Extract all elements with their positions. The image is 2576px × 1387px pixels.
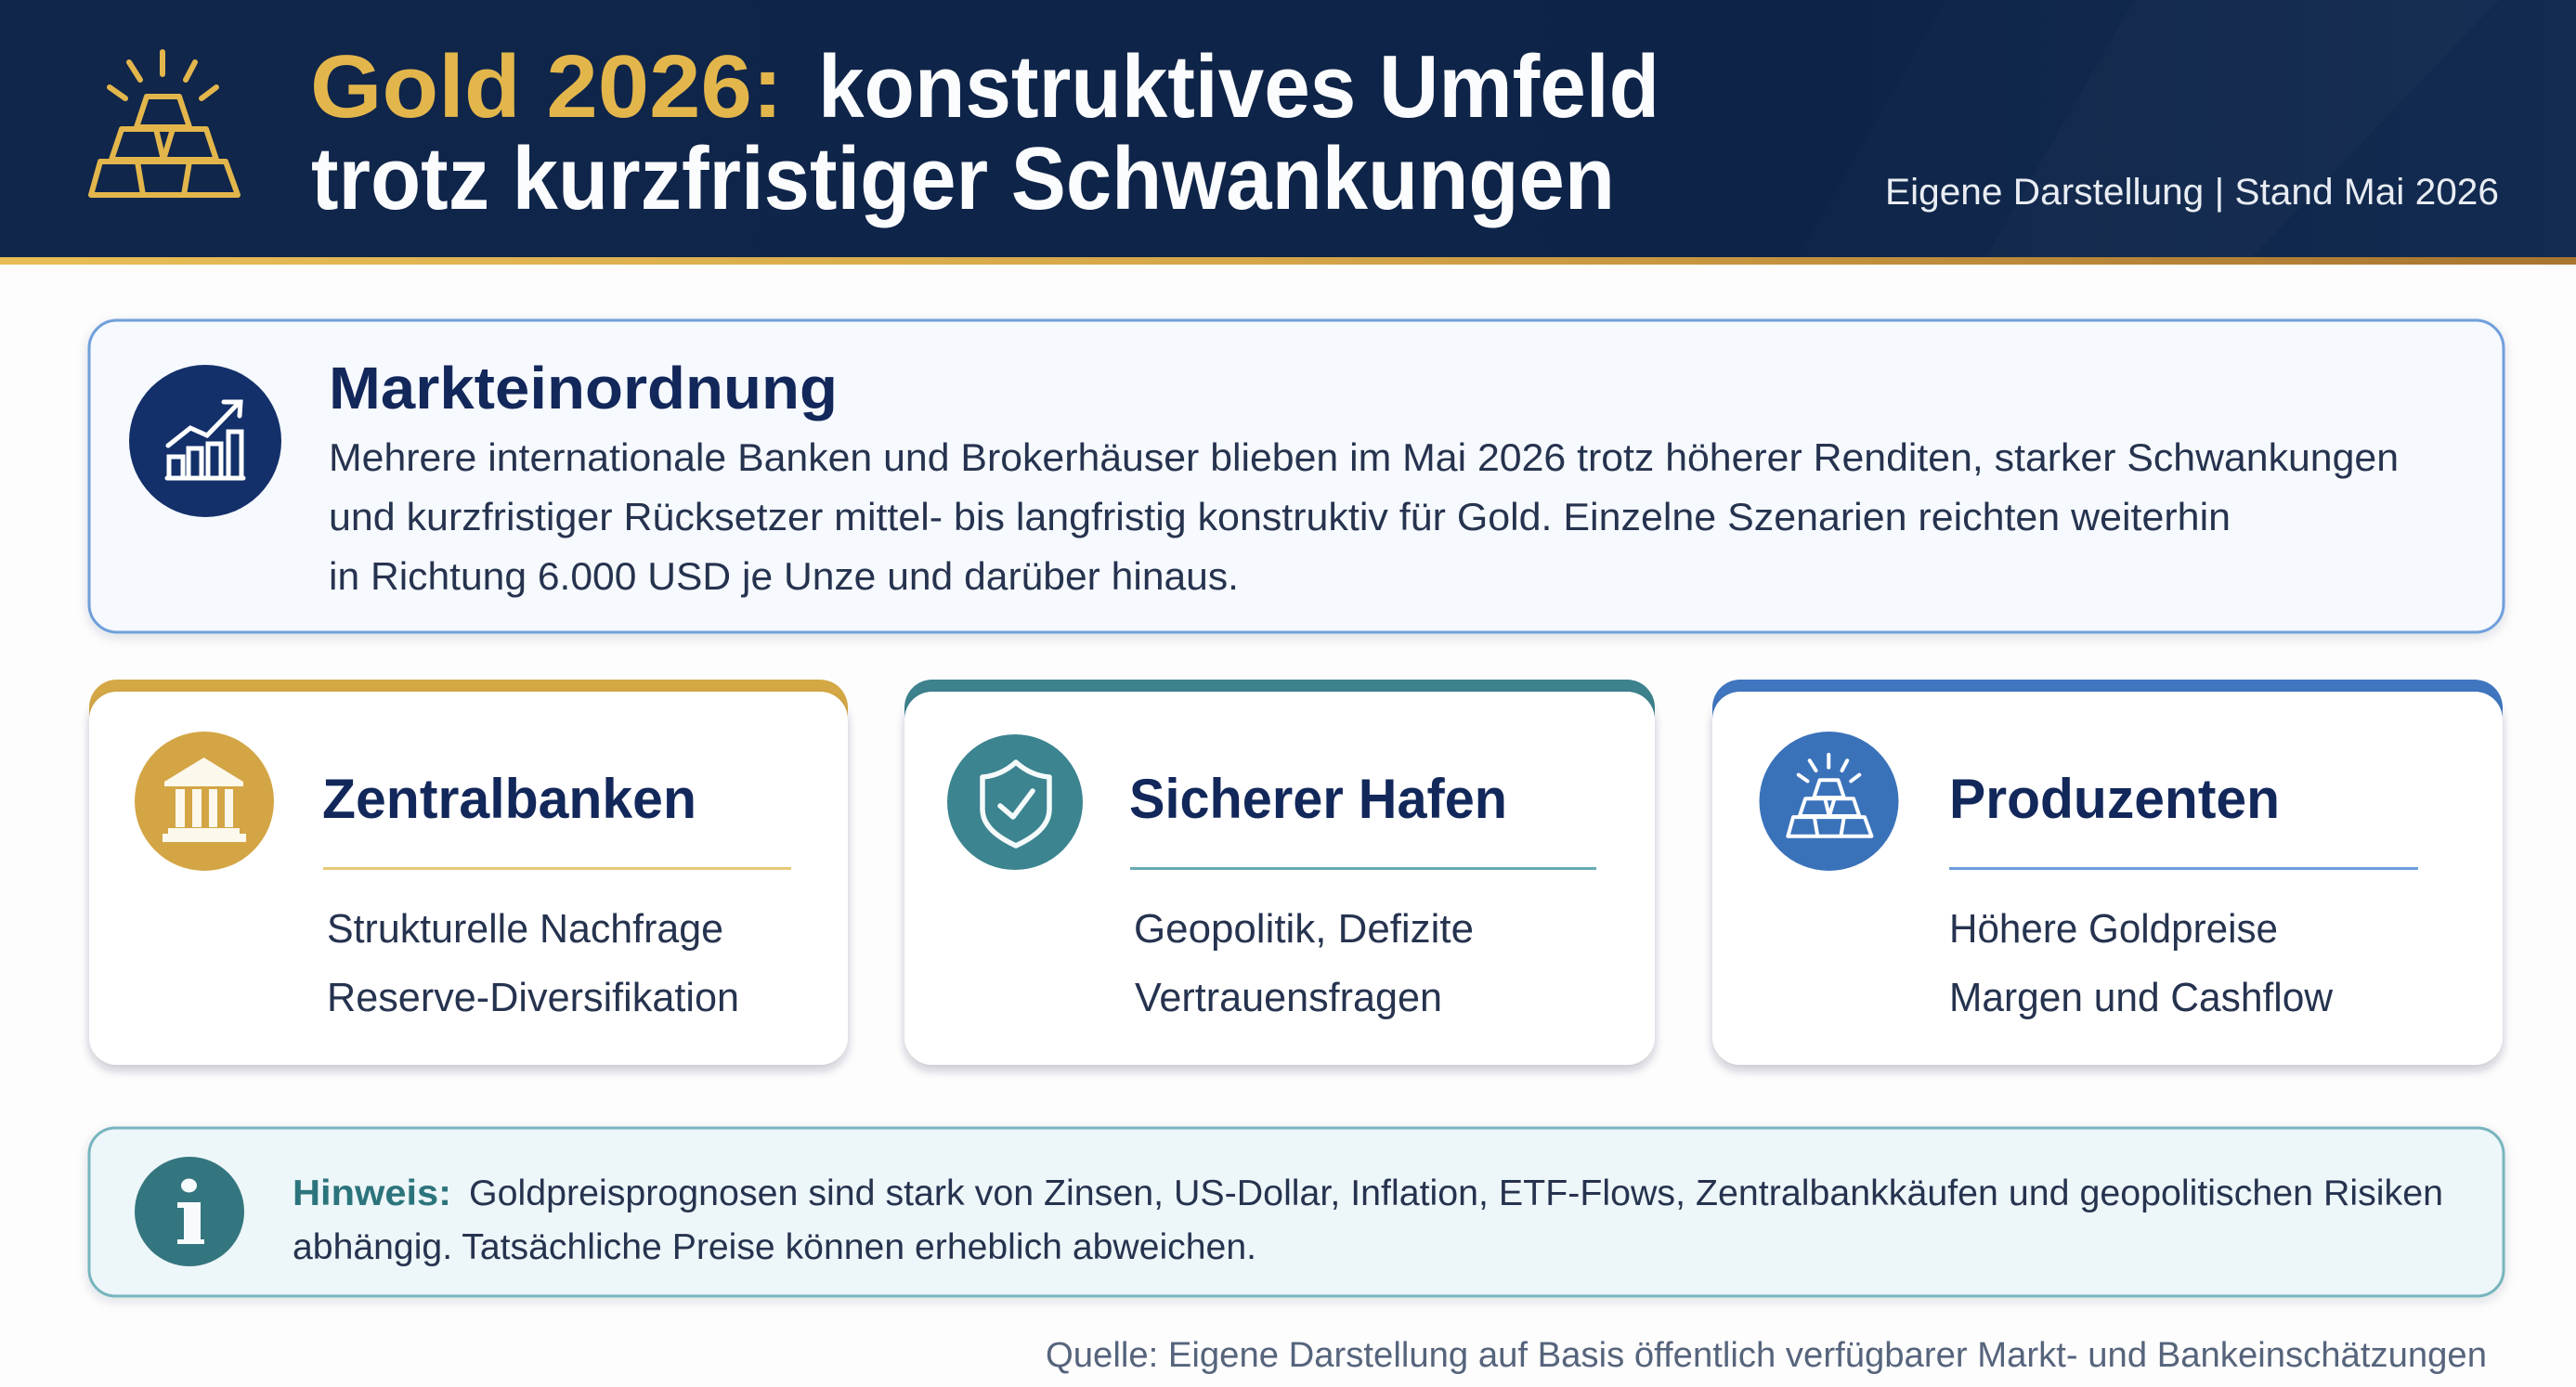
note text: abhängig. Tatsächliche Preise können erheblich abweichen. xyxy=(293,1227,1256,1267)
title: trotz kurzfristiger Schwankungen xyxy=(311,129,1615,228)
panel: Zentralbanken xyxy=(89,680,848,1065)
title: konstruktives Umfeld xyxy=(818,37,1659,136)
heading: Zentralbanken xyxy=(322,768,696,830)
note text xyxy=(293,1173,2443,1267)
body text: Mehrere internationale Banken und Brokerhäuser blieben im Mai 2026 trotz höherer Renditen, starker Schwankungen xyxy=(329,435,2399,479)
heading: Sicherer Hafen xyxy=(1129,768,1507,830)
list: Strukturelle Nachfrage xyxy=(327,906,723,952)
body text: in Richtung 6.000 USD je Unze und darüber hinaus. xyxy=(329,554,1239,598)
panel: Sicherer Hafen xyxy=(904,680,1655,1065)
icon: growth chart xyxy=(129,365,281,517)
list xyxy=(1134,906,1474,1020)
note text: Goldpreisprognosen sind stark von Zinsen, US-Dollar, Inflation, ETF-Flows, Zentralbankkäufen und geopolitischen Risiken xyxy=(469,1173,2443,1213)
list: Geopolitik, Defizite xyxy=(1134,906,1474,952)
list xyxy=(1949,906,2333,1020)
header band xyxy=(0,0,2576,265)
icon: gold bars xyxy=(91,52,238,195)
header note: Eigene Darstellung | Stand Mai 2026 xyxy=(1885,172,2499,213)
icon: gold bars on blue xyxy=(1759,732,1898,871)
icon: info xyxy=(135,1157,244,1266)
source line: Quelle: Eigene Darstellung auf Basis öffentlich verfügbarer Markt- und Bankeinschätzungen xyxy=(1046,1336,2487,1375)
heading: Markteinordnung xyxy=(329,355,838,421)
panel: Produzenten xyxy=(1712,680,2503,1065)
icon: shield xyxy=(947,734,1083,870)
list: Vertrauensfragen xyxy=(1135,975,1442,1020)
body text xyxy=(329,435,2399,598)
panel: Markteinordnung xyxy=(89,320,2504,632)
body text: und kurzfristiger Rücksetzer mittel- bis langfristig konstruktiv für Gold. Einzelne Szenarien reichten weiterhin xyxy=(329,495,2231,538)
title xyxy=(310,37,1659,228)
title: Gold 2026: xyxy=(310,37,783,136)
note text: Hinweis: xyxy=(293,1173,451,1213)
panel: Hinweis xyxy=(89,1128,2504,1296)
list xyxy=(327,906,739,1020)
heading: Produzenten xyxy=(1949,768,2280,830)
icon: bank xyxy=(135,732,274,871)
list: Höhere Goldpreise xyxy=(1949,906,2278,952)
list: Margen und Cashflow xyxy=(1949,975,2333,1020)
list: Reserve-Diversifikation xyxy=(327,975,739,1020)
